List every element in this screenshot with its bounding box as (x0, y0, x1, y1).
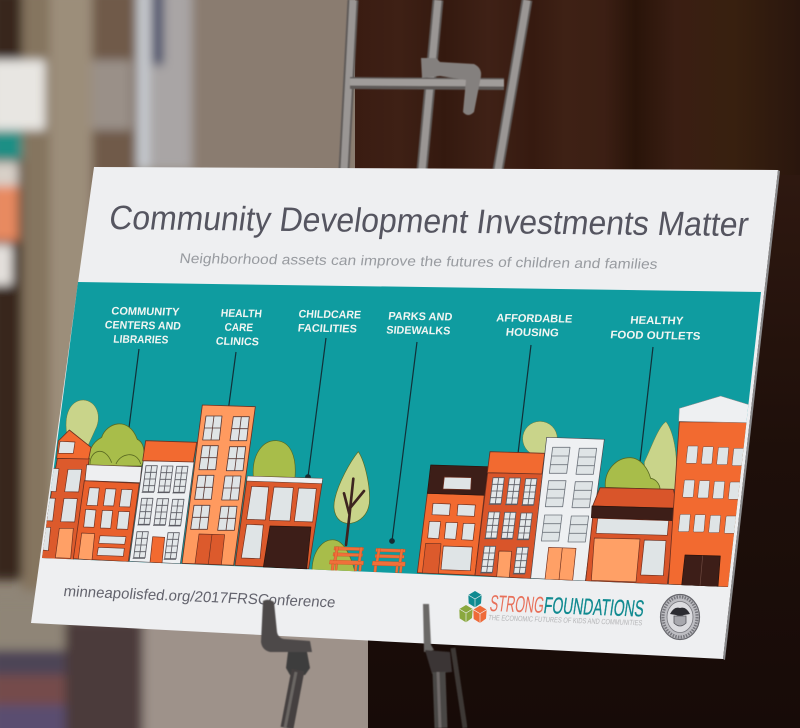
right half of street (417, 396, 753, 587)
healthy food outlet (586, 488, 678, 584)
affordable housing (475, 452, 545, 579)
pointed tree (644, 422, 677, 489)
bush behind white building (87, 424, 144, 466)
wordmark foundations: FOUNDATIONS (542, 592, 646, 621)
logo: strong foundations (459, 590, 646, 627)
asset labels (104, 305, 701, 348)
label: community centers and libraries: CENTERS AND (104, 319, 181, 333)
bench (329, 547, 364, 571)
bush by benches (312, 540, 355, 572)
label: parks and sidewalks (386, 311, 453, 337)
label: affordable housing: HOUSING (505, 327, 559, 339)
house: far left brick (40, 430, 91, 560)
label: health care clinics: CARE (224, 322, 254, 334)
library building (73, 465, 142, 562)
conference url: minneapolisfed.org/2017FRSConference (62, 583, 337, 611)
corner brick building (668, 396, 753, 587)
federal reserve seal (660, 594, 700, 640)
left half of street (40, 400, 405, 573)
label: parks and sidewalks: PARKS AND (388, 311, 453, 323)
tree: back left (66, 400, 98, 445)
icon: three cubes (459, 591, 487, 623)
label: health care clinics (215, 308, 262, 348)
label: healthy food outlets (610, 315, 701, 343)
easel upper frame (344, 0, 527, 170)
teal panel (42, 282, 761, 587)
label: childcare facilities: FACILITIES (297, 323, 357, 335)
label: parks and sidewalks: SIDEWALKS (386, 325, 451, 337)
subtitle: Neighborhood assets can improve the futures of children and families (179, 250, 659, 272)
wordmark strong: STRONG (488, 590, 546, 618)
label: affordable housing: AFFORDABLE (496, 312, 573, 326)
label: health care clinics: HEALTH (220, 308, 262, 320)
label: community centers and libraries: LIBRARIES (113, 334, 169, 346)
white tower (531, 437, 604, 581)
label: childcare facilities: CHILDCARE (298, 309, 362, 321)
sign board (31, 167, 780, 660)
white rowhouse (129, 441, 197, 564)
leader lines (121, 338, 653, 543)
label: affordable housing (496, 312, 573, 339)
tagline: THE ECONOMIC FUTURES OF KIDS AND COMMUNITIES (488, 613, 643, 627)
easel right hook (423, 604, 465, 728)
health clinic tower (182, 405, 255, 565)
icon: easel clip (421, 58, 481, 115)
childcare building (235, 476, 323, 569)
bush behind childcare (253, 441, 295, 477)
bench (372, 548, 405, 573)
tree behind white tower (523, 421, 557, 456)
title: Community Development Investments Matter (107, 199, 751, 244)
bush (605, 458, 660, 489)
label: community centers and libraries: COMMUNITY (111, 305, 181, 319)
label: community centers and libraries (104, 305, 181, 346)
storefront building (417, 465, 488, 575)
tree (334, 452, 370, 545)
neighborhood illustration (40, 338, 753, 587)
easel left hook (261, 600, 312, 728)
label: health care clinics: CLINICS (215, 336, 259, 348)
label: childcare facilities (297, 309, 362, 335)
label: healthy food outlets: HEALTHY (630, 315, 685, 327)
label: healthy food outlets: FOOD OUTLETS (610, 329, 701, 343)
